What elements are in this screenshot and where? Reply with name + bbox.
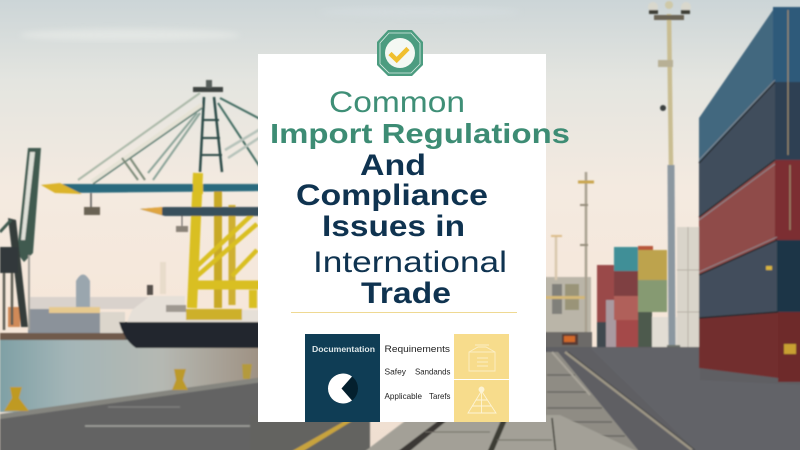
panel: white title card bbox=[258, 30, 570, 422]
bottom pavement under panel bbox=[250, 415, 645, 450]
text list: requirements: Sandands bbox=[415, 366, 450, 376]
right: distant containers and pole bbox=[540, 1, 800, 450]
big container stack bbox=[699, 10, 775, 163]
title: Common bbox=[329, 86, 465, 119]
title: Trade bbox=[361, 277, 451, 310]
title: Issues in bbox=[322, 210, 465, 243]
text list: requirements: Safey bbox=[384, 366, 407, 376]
text list: requirements: Tarefs bbox=[429, 391, 450, 401]
icon: warehouse bbox=[469, 345, 495, 371]
lamp pole bbox=[669, 14, 671, 165]
bollards bbox=[4, 387, 29, 411]
panel: documentation bbox=[305, 334, 380, 422]
title: And bbox=[360, 149, 426, 182]
icon: pyramid tower bbox=[468, 387, 496, 413]
text list: requirements: Applicable bbox=[384, 391, 422, 401]
icon: pie chart bbox=[328, 374, 358, 404]
dark crane at left bbox=[17, 148, 41, 262]
panel: documentation: Documentation bbox=[312, 344, 375, 354]
yellow crane bbox=[192, 173, 270, 308]
text list: requirements bbox=[384, 344, 450, 401]
title bbox=[270, 86, 570, 310]
panel: yellow icon tiles bbox=[454, 334, 509, 422]
icon: green octagon check badge bbox=[377, 30, 423, 76]
title: International bbox=[313, 246, 507, 279]
left harbour with cranes and ship bbox=[0, 80, 270, 450]
ground bbox=[540, 347, 800, 450]
quay bbox=[0, 378, 270, 450]
title: Import Regulations bbox=[270, 118, 570, 149]
ship bbox=[119, 322, 270, 348]
title: Compliance bbox=[296, 179, 488, 212]
crane booms bbox=[41, 184, 270, 193]
text list: requirements: Requinements bbox=[384, 344, 450, 355]
